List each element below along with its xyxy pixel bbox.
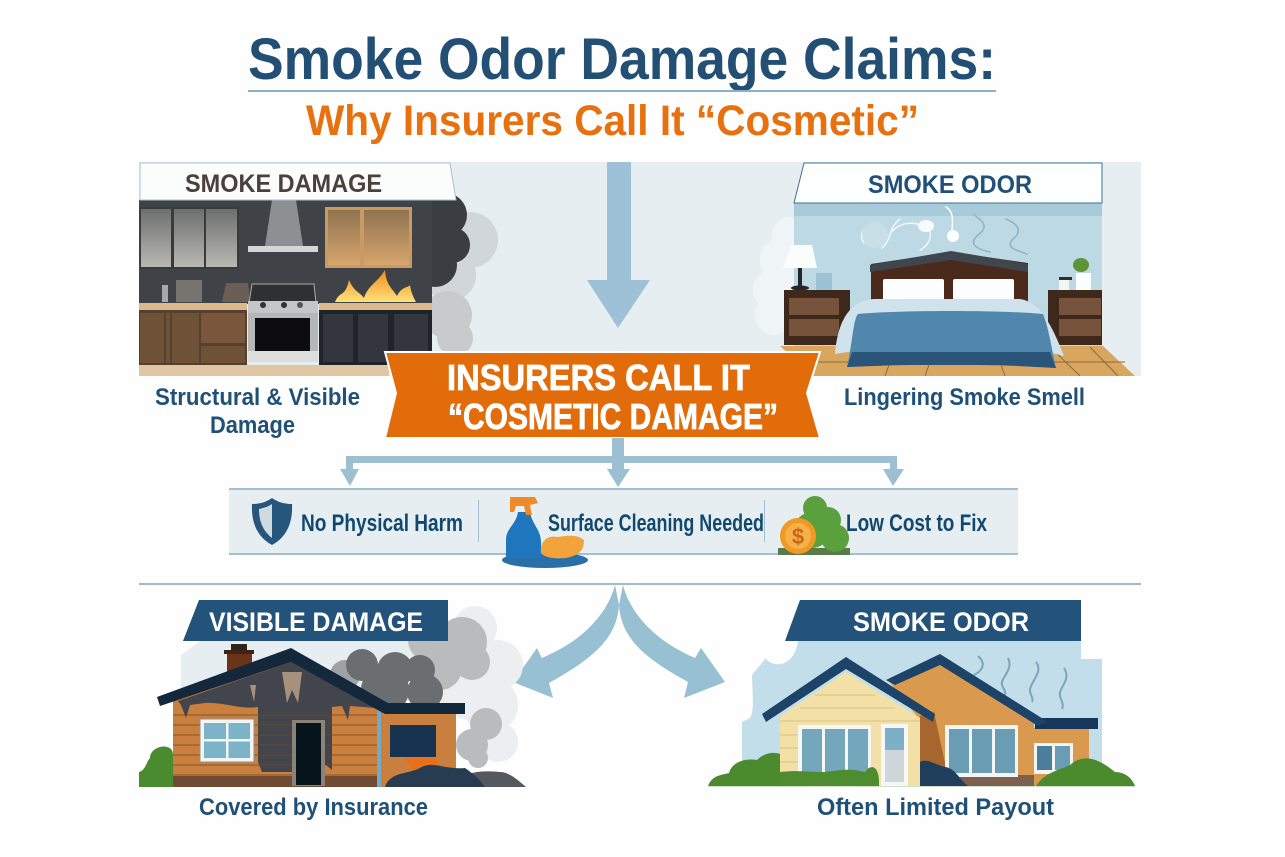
icon: coin and bush [778, 496, 850, 555]
wall top band [794, 203, 1102, 216]
pale smoke cloud [753, 217, 808, 335]
wing roof [1035, 718, 1098, 729]
foundation [960, 775, 1034, 786]
label: lingering smoke smell: Lingering Smoke Smell [844, 384, 1085, 411]
panel: top background [139, 162, 1141, 376]
callout: insurers call it cosmetic damage [385, 352, 820, 438]
banner text: SMOKE ODOR [868, 171, 1032, 199]
smoke cloud [390, 193, 498, 356]
icon: coin and bush: $ [792, 524, 804, 549]
right nightstand [1048, 290, 1102, 345]
dark window [390, 725, 436, 757]
scorch marks [178, 662, 376, 772]
siding lines [780, 695, 920, 762]
foundation [173, 776, 381, 787]
sky behind house [742, 641, 1102, 770]
right upper cabinets [325, 207, 412, 268]
wing [1034, 728, 1089, 786]
counter appliances [162, 280, 250, 302]
yellow house window [798, 725, 871, 777]
yellow house [780, 672, 920, 786]
bedroom wall [794, 203, 1102, 348]
text: surface cleaning needed: Surface Cleaning Needed [548, 510, 764, 537]
stove [248, 284, 318, 362]
headboard [870, 251, 1028, 303]
text: low cost to fix: Low Cost to Fix [846, 510, 988, 537]
banner: smoke odor [785, 600, 1081, 641]
callout line 1: INSURERS CALL IT [447, 357, 750, 398]
lamp [783, 245, 817, 290]
bed cover [835, 299, 1064, 356]
panel: smoke damage kitchen [139, 163, 498, 376]
yellow roof [762, 657, 935, 722]
siding lines [173, 715, 381, 775]
kitchen wall [139, 200, 432, 304]
title underline [248, 90, 996, 92]
blue blanket [847, 311, 1056, 368]
arrow: down to banner [587, 162, 650, 328]
floor [780, 346, 1135, 376]
door [292, 720, 325, 786]
banner: smoke odor [794, 163, 1102, 203]
arrow: curved right [619, 585, 725, 698]
odor wisps [974, 656, 1066, 709]
label: structural and visible damage: Damage [210, 412, 295, 439]
banner: smoke damage [140, 163, 456, 200]
panel: smoke odor bedroom [753, 163, 1135, 376]
blanket hem [847, 352, 1056, 368]
door [881, 724, 908, 786]
banner text: VISIBLE DAMAGE [209, 607, 423, 637]
arrows: three-way branch [340, 438, 904, 487]
sky behind house [181, 641, 448, 700]
rubble ash [450, 771, 526, 787]
smoke cloud [330, 606, 523, 768]
left upper cabinets [140, 207, 239, 269]
bush left [708, 753, 780, 786]
range hood [248, 200, 318, 252]
orange house [888, 658, 1034, 786]
plant [1059, 258, 1091, 290]
section divider [139, 583, 1141, 585]
flames [335, 270, 416, 302]
callout line 2: “COSMETIC DAMAGE” [448, 396, 778, 437]
bush right [1036, 758, 1135, 786]
pillows [883, 279, 1014, 301]
icon: shield [252, 498, 292, 545]
lower dark cabinets [319, 310, 432, 365]
orange roof [886, 654, 1048, 726]
downpipe [377, 710, 381, 787]
title: Smoke Odor Damage Claims: [248, 27, 996, 92]
panel: smoke odor house [708, 600, 1135, 787]
label: structural and visible damage: Structural & Visible [155, 384, 360, 411]
lower brown cabinets [139, 310, 247, 365]
left nightstand [784, 290, 850, 345]
house wall [173, 655, 381, 787]
label: covered by insurance: Covered by Insurance [199, 794, 428, 821]
banner text: SMOKE ODOR [853, 607, 1029, 637]
glass [816, 273, 832, 290]
orange house window [945, 725, 1018, 777]
counter [139, 303, 432, 310]
window [200, 719, 254, 762]
icon: spray bottle and sponge [502, 497, 588, 568]
right wing [381, 713, 456, 787]
panel: visible damage house [139, 600, 526, 787]
banner text: SMOKE DAMAGE [185, 170, 382, 198]
ground line [708, 786, 1135, 787]
strip: why cosmetic [229, 488, 1018, 568]
roof [157, 648, 465, 714]
rubble [385, 765, 485, 787]
hedge [780, 767, 879, 786]
arrow: curved left [513, 585, 619, 698]
subtitle: Why Insurers Call It “Cosmetic” [306, 97, 919, 145]
smell wisps [862, 207, 1027, 254]
floor [139, 365, 389, 376]
bush [139, 747, 173, 787]
pale streaks [250, 672, 302, 703]
text: no physical harm: No Physical Harm [301, 510, 463, 537]
wing window [1034, 743, 1073, 774]
floor lines [815, 347, 1125, 376]
dark shrub [920, 761, 968, 786]
banner: visible damage [183, 600, 448, 641]
orange shadow [920, 712, 950, 786]
chimney [224, 644, 254, 672]
label: often limited payout: Often Limited Payout [817, 794, 1054, 821]
glow [405, 758, 440, 775]
